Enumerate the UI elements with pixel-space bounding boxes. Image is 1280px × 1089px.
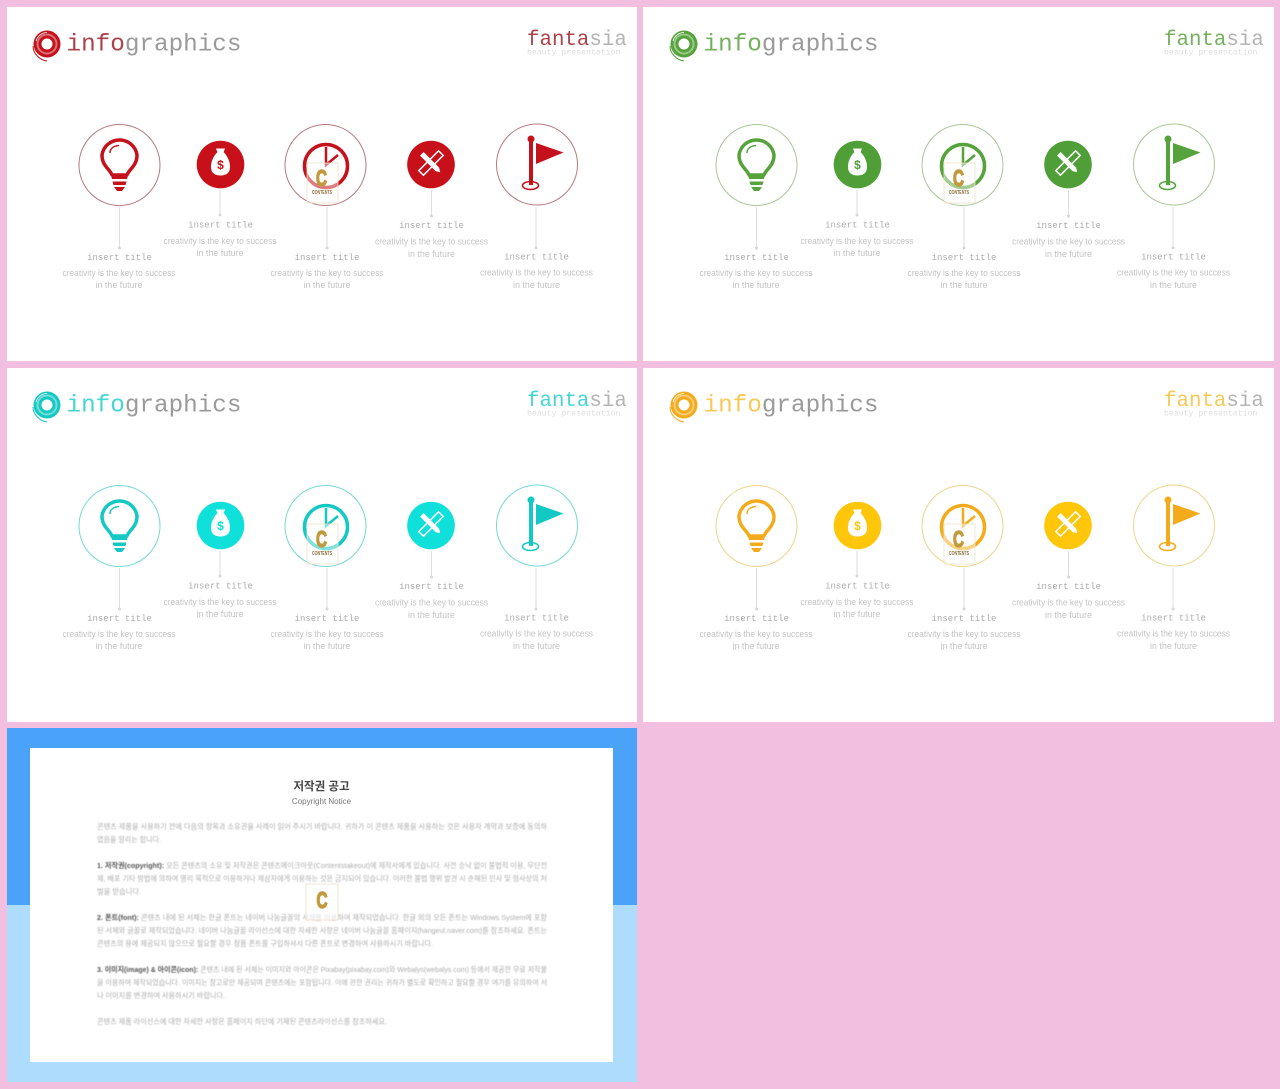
item 4: ruler and pencil: in the future (1045, 610, 1092, 620)
item 2: money bag: in the future (196, 248, 244, 258)
watermark: C (953, 526, 964, 552)
item 4: ruler and pencil: insert title (399, 221, 464, 231)
item 5: flag: insert title (504, 252, 569, 262)
notice heading: 저작권 공고 (293, 779, 350, 793)
item 1: lightbulb: insert title (724, 253, 789, 263)
item 2: money bag: insert title (188, 582, 253, 592)
item 3: clock (908, 124, 1021, 290)
watermark (944, 163, 975, 203)
item 2: money bag: creativity is the key to success (800, 236, 914, 246)
item 2: money bag: in the future (196, 609, 244, 619)
item 1: lightbulb: in the future (96, 280, 142, 290)
item 4: ruler and pencil: insert title (1036, 582, 1101, 592)
item 5: flag: in the future (513, 641, 560, 651)
item 3: clock (270, 486, 384, 651)
item 3: clock: insert title (932, 614, 996, 624)
item 4: ruler and pencil (375, 502, 488, 620)
item 2: money bag: insert title (188, 220, 253, 230)
item 3: clock: insert title (932, 253, 996, 263)
section 1: copyright: 제, 배포 기타 방법에 의하여 영리 목적으로 이용하거나 제삼자에게 이용하는 것은 금지되어 있습니다. 이러한 불법 행위 발견 시 손해된 민사 및 형사상의 처 (97, 874, 547, 883)
section 3: image and icon: 을 이용하여 제작되었습니다. 이미지는 참고로만 제공되며 콘텐츠에는 포함됩니다. 이에 관한 권리는 귀하가 별도로 확인하고 필요할 경우 여기를 유의하여 서 (97, 978, 547, 987)
panel: green infographic slide (643, 7, 1274, 361)
item 2: money bag: in the future (834, 609, 880, 619)
item 1: lightbulb: insert title (87, 253, 152, 263)
heading: infographics: infographics (704, 32, 878, 58)
item 1: lightbulb (700, 486, 813, 651)
brand subtitle: beauty presentation (527, 48, 620, 58)
item 2: money bag: in the future (834, 248, 880, 258)
item 4: ruler and pencil (1012, 141, 1125, 259)
item 5: flag: in the future (1150, 641, 1197, 651)
item 5: flag: in the future (1150, 280, 1197, 290)
item 2: money bag: $ (854, 519, 861, 533)
item 1: lightbulb: creativity is the key to success (62, 268, 176, 278)
item 2: money bag: creativity is the key to success (164, 597, 277, 607)
item 5: flag (480, 124, 593, 290)
section 3: image and icon: 3. 이미지(image) & 아이콘(icon): 콘텐츠 내에 된 서체는 이미지와 아이콘은 Pixabay(pixabay.com)와 Webalys(webalys.com) 등에서 제공한 무료 저작물 (97, 965, 547, 974)
item 5: flag (480, 485, 593, 651)
item 5: flag: insert title (1141, 614, 1206, 624)
item 4: ruler and pencil (375, 141, 488, 259)
brand subtitle: beauty presentation (1164, 48, 1257, 58)
item 5: flag: insert title (504, 614, 569, 624)
logo: spiral (670, 392, 698, 422)
watermark: CONTENTS (949, 190, 969, 196)
watermark: CONTENTS (312, 190, 332, 196)
section 1: copyright: 벌을 받습니다. (97, 887, 141, 896)
panel: copyright notice (7, 728, 637, 1082)
brand: fantasia: fantasia (1164, 390, 1264, 413)
item 2: money bag: insert title (825, 220, 890, 230)
item 1: lightbulb: in the future (732, 641, 780, 651)
item 4: ruler and pencil: creativity is the key to success (375, 236, 488, 246)
intro paragraph (97, 822, 547, 844)
notice subheading: Copyright Notice (292, 797, 352, 806)
item 3: clock: insert title (295, 253, 359, 263)
item 2: money bag (800, 502, 914, 619)
item 1: lightbulb: creativity is the key to success (700, 268, 813, 278)
item 1: lightbulb (62, 124, 176, 290)
item 2: money bag (800, 141, 914, 258)
item 4: ruler and pencil: insert title (1036, 221, 1101, 231)
item 3: clock: creativity is the key to success (270, 268, 384, 278)
item 2: money bag: $ (217, 158, 224, 172)
item 3: clock (908, 486, 1021, 651)
watermark: C (316, 887, 328, 913)
item 5: flag: creativity is the key to success (480, 628, 593, 638)
item 4: ruler and pencil: in the future (408, 610, 455, 620)
watermark (307, 524, 338, 564)
item 3: clock: creativity is the key to success (270, 629, 384, 639)
item 2: money bag: creativity is the key to success (164, 236, 277, 246)
item 5: flag: creativity is the key to success (1117, 268, 1230, 278)
brand: fantasia: fantasia (527, 29, 627, 52)
panel: red infographic slide (7, 7, 637, 361)
item 1: lightbulb: in the future (96, 641, 142, 651)
item 2: money bag (164, 502, 277, 619)
item 4: ruler and pencil: creativity is the key to success (375, 598, 488, 608)
item 5: flag (1117, 124, 1230, 290)
item 4: ruler and pencil: insert title (399, 582, 464, 592)
watermark: C (953, 165, 964, 191)
logo: spiral (670, 30, 698, 61)
item 3: clock: in the future (940, 280, 988, 290)
item 1: lightbulb (62, 486, 176, 651)
item 3: clock: creativity is the key to success (908, 268, 1021, 278)
item 2: money bag: insert title (825, 582, 890, 592)
section 3: image and icon (97, 965, 547, 1000)
watermark (306, 884, 338, 920)
item 5: flag: creativity is the key to success (480, 268, 593, 278)
section 1: copyright: 1. 저작권(copyright): 모든 콘텐츠의 소유 및 저작권은 콘텐츠메이크아웃(Contentstakeout)에 제작사에게 있습니다. 사전 승낙 없이 불법적 이용, 무단전 (97, 861, 547, 870)
brand: fantasia: fantasia (527, 390, 627, 413)
item 3: clock: in the future (940, 641, 988, 651)
item 2: money bag: $ (217, 519, 224, 533)
item 2: money bag (164, 141, 277, 258)
watermark (944, 524, 975, 564)
item 1: lightbulb: creativity is the key to success (700, 629, 813, 639)
panel: yellow infographic slide (643, 368, 1274, 722)
item 5: flag (1117, 485, 1230, 651)
item 3: clock: in the future (304, 280, 350, 290)
item 1: lightbulb (700, 124, 813, 290)
logo: spiral (33, 392, 60, 422)
watermark: C (316, 165, 327, 191)
item 1: lightbulb: insert title (87, 614, 152, 624)
closing line: 콘텐츠 제품 라이선스에 대한 자세한 사항은 홈페이지 하단에 기재된 콘텐츠라이선스를 참조하세요. (97, 1017, 387, 1026)
section 2: font: 콘텐츠의 용에 제공되지 않으므로 필요할 경우 정품 폰트를 구입하셔서 다른 폰트로 변경하여 사용하시기 바랍니다. (97, 939, 433, 948)
heading: infographics: infographics (704, 392, 878, 420)
item 4: ruler and pencil: creativity is the key to success (1012, 236, 1125, 246)
item 4: ruler and pencil: in the future (408, 249, 455, 259)
watermark: C (316, 526, 327, 552)
section 2: font: 2. 폰트(font): 콘텐츠 내에 된 서체는 한글 폰트는 네이버 나눔글꼴의 서체를 이용하여 제작되었습니다. 한글 외의 모든 폰트는 Windows System에 포함 (97, 913, 547, 922)
brand: fantasia: fantasia (1164, 29, 1264, 52)
section 2: font: 된 서체와 글꼴로 제작되었습니다. 네이버 나눔글꼴 라이선스에 대한 자세한 사항은 네이버 나눔글꼴 홈페이지(hangeul.naver.com)를 참조하세요. 폰트는 (97, 926, 547, 935)
panel: cyan infographic slide (7, 368, 637, 722)
item 4: ruler and pencil (1012, 502, 1125, 620)
item 4: ruler and pencil: creativity is the key to success (1012, 598, 1125, 608)
item 5: flag: creativity is the key to success (1117, 628, 1230, 638)
item 4: ruler and pencil: in the future (1045, 249, 1092, 259)
section 2: font (97, 913, 547, 948)
section 1: copyright (97, 861, 547, 896)
intro paragraph: 였음을 알리는 합니다. (97, 835, 161, 844)
item 5: flag: insert title (1141, 252, 1206, 262)
item 3: clock: in the future (304, 641, 350, 651)
brand subtitle: beauty presentation (527, 408, 620, 418)
logo: spiral (33, 30, 60, 61)
section 3: image and icon: 나 이미지를 변경하여 사용하시기 바랍니다. (97, 991, 225, 1000)
intro paragraph: 콘텐츠 제품을 사용하기 전에 다음의 항목과 소유권을 사례이 읽어 주시기 바랍니다. 귀하가 이 콘텐츠 제품을 사용하는 것은 사용자 계약과 보증에 동의하 (97, 822, 547, 831)
item 5: flag: in the future (513, 280, 560, 290)
item 1: lightbulb: creativity is the key to success (62, 629, 176, 639)
item 1: lightbulb: insert title (724, 614, 789, 624)
heading: infographics: infographics (66, 392, 241, 420)
watermark: CONTENTS (949, 551, 969, 557)
item 3: clock (270, 124, 384, 290)
brand subtitle: beauty presentation (1164, 408, 1257, 418)
item 3: clock: insert title (295, 614, 359, 624)
item 2: money bag: creativity is the key to success (800, 597, 914, 607)
heading: infographics: infographics (66, 32, 241, 58)
item 1: lightbulb: in the future (732, 280, 780, 290)
watermark: CONTENTS (312, 551, 332, 557)
item 2: money bag: $ (854, 158, 861, 172)
watermark (307, 163, 338, 203)
item 3: clock: creativity is the key to success (908, 629, 1021, 639)
